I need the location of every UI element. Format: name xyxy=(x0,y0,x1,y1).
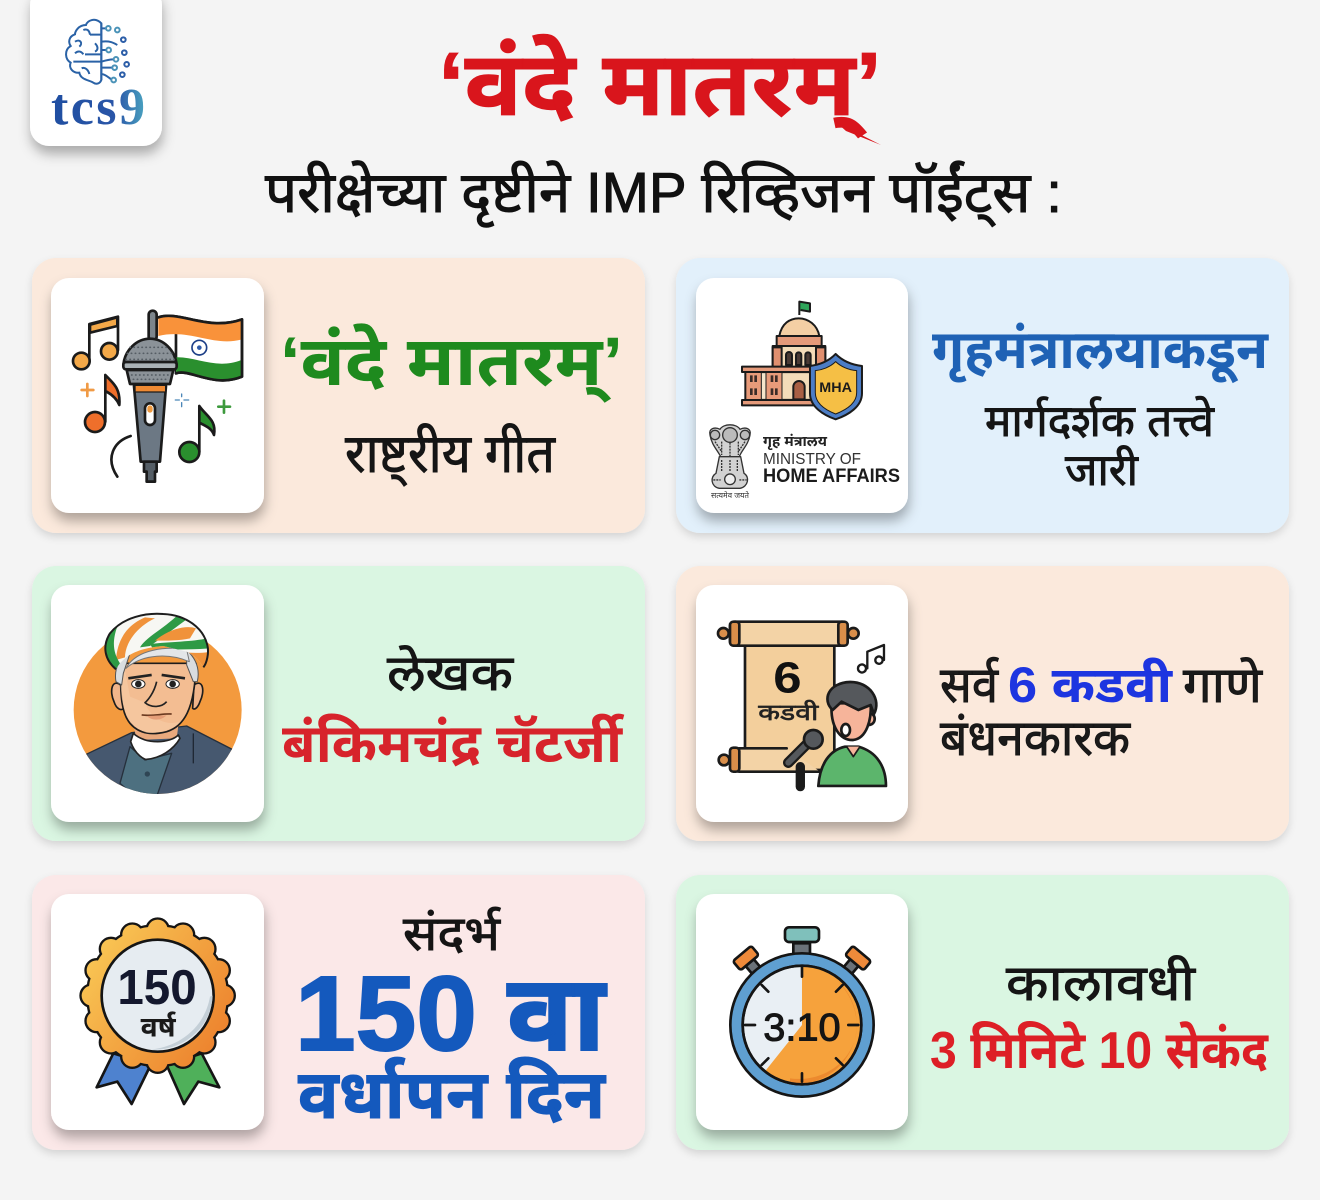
icon: portrait of the author xyxy=(74,614,242,803)
heading: anniversary: वर्धापन दिन xyxy=(298,1057,606,1133)
panel: six stanzas xyxy=(676,566,1289,841)
heading: from home ministry: गृहमंत्रालयाकडून xyxy=(932,320,1270,384)
text: guidelines: मार्गदर्शक तत्त्वे xyxy=(985,395,1216,446)
logo: tcs9 xyxy=(30,0,162,146)
panel: 150th anniversary xyxy=(32,875,645,1150)
icon: ministry building with shield xyxy=(710,302,862,488)
panel: duration xyxy=(676,875,1289,1150)
label: stanzas: कडवी xyxy=(758,699,820,725)
text: emblem motto: सत्यमेव जयते xyxy=(711,491,749,500)
icon: 150 years rosette xyxy=(82,920,234,1104)
title: ‘वंदे मातरम्’ xyxy=(438,34,882,139)
label: 6: 6 xyxy=(773,654,802,703)
text: ministry of: MINISTRY OF xyxy=(763,451,861,468)
text: all six stanzas xyxy=(940,657,1263,713)
panel: author xyxy=(32,566,645,841)
icon: circuit brain xyxy=(66,20,129,84)
text: ministry name hindi: गृह मंत्रालय xyxy=(763,433,828,451)
icon: national emblem xyxy=(710,425,750,488)
icon: stopwatch xyxy=(730,927,874,1097)
label: MHA: MHA xyxy=(819,379,852,395)
panel: national song xyxy=(32,258,645,533)
icon: scroll and singer xyxy=(718,622,886,787)
subtitle: परीक्षेच्या दृष्टीने IMP रिव्हिजन पॉईंट्स : xyxy=(265,160,1062,228)
label: years: वर्ष xyxy=(141,1011,177,1043)
panel: home ministry xyxy=(676,258,1289,533)
text: all six stanzas: सर्व xyxy=(940,657,999,713)
text: issued: जारी xyxy=(1065,445,1140,495)
text: author label: लेखक xyxy=(387,645,515,701)
text: reference: संदर्भ xyxy=(403,906,501,961)
heading: vande mataram: ‘वंदे मातरम्’ xyxy=(280,322,623,403)
text: duration: कालावधी xyxy=(1006,955,1196,1011)
text: all six stanzas: गाणे xyxy=(1183,657,1263,713)
icon: microphone with flag and music notes xyxy=(73,311,242,482)
turban xyxy=(105,614,208,669)
label: 150: 150 xyxy=(117,960,197,1015)
label: time on dial: 3:10 xyxy=(763,1006,841,1050)
heading: author name: बंकिमचंद्र चॅटर्जी xyxy=(282,713,625,774)
heading: length: 3 मिनिटे 10 सेकंद xyxy=(930,1021,1269,1080)
text: national song: राष्ट्रीय गीत xyxy=(345,423,556,488)
music notes xyxy=(89,317,118,362)
heading: 150th: 150 वा xyxy=(295,955,607,1073)
text: all six stanzas: 6 कडवी xyxy=(1008,657,1173,713)
text: home affairs: HOME AFFAIRS xyxy=(763,466,900,487)
text: mandatory: बंधनकारक xyxy=(940,710,1132,766)
logo wordmark: tcs9 xyxy=(51,79,145,136)
